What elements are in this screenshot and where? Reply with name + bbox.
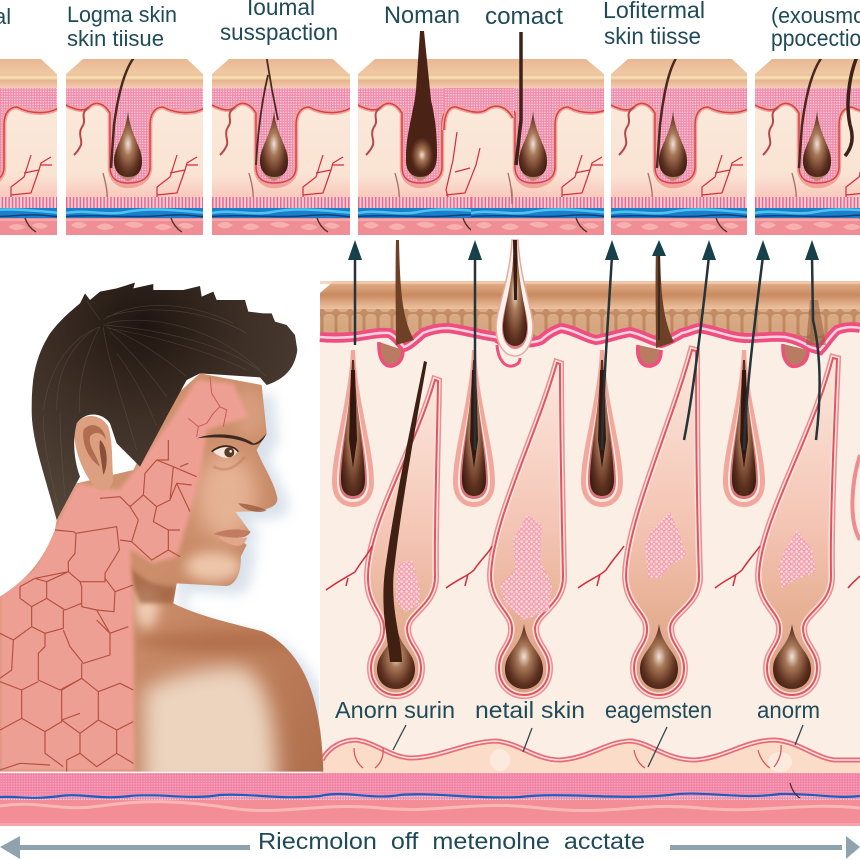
label: anorm: anorm — [757, 697, 820, 723]
label: panel 4 left: Noman — [384, 2, 460, 29]
hair shaft follicle mid right — [656, 250, 674, 348]
arrow: follicle up 4 — [652, 240, 666, 340]
skin base — [0, 373, 323, 772]
swollen follicle 1 — [368, 361, 438, 695]
panel: top skin tissue cross-section 1 — [0, 59, 60, 235]
panel: large skin cross-section — [320, 240, 860, 776]
lips — [213, 529, 251, 546]
label: netail skin: netail skin — [475, 697, 585, 723]
arrow: follicle up 5 — [684, 240, 716, 440]
label: eagemsten: eagemsten — [605, 697, 712, 723]
gland pit 3 — [783, 344, 808, 366]
right edge follicle fragment — [852, 455, 860, 540]
swollen follicle 2 — [491, 363, 563, 695]
capillaries — [326, 546, 860, 590]
label: panel 5 line 2: skin tiisse — [604, 23, 701, 49]
ear — [75, 416, 113, 491]
label: anorn surin: Anorn surin — [335, 697, 455, 723]
arrow: bottom left — [0, 836, 250, 859]
caption: Riecmolon off metenolne acctate — [258, 828, 645, 854]
pink epidermal wave — [320, 327, 860, 350]
gland pit 2 — [638, 345, 661, 366]
leader lines for bottom labels — [393, 725, 803, 767]
arrow: normal follicle up 1 — [348, 240, 362, 345]
swollen follicle 4 — [759, 358, 837, 695]
hair — [32, 283, 297, 520]
gland pit 1 — [379, 342, 403, 366]
skin shading — [0, 380, 297, 790]
cell cluster — [645, 512, 686, 578]
arrow: follicle up 7 — [805, 240, 820, 440]
panel: top skin tissue cross-section 6 — [755, 50, 860, 235]
arrow: bottom right — [670, 836, 860, 859]
heading labels for top panels — [0, 0, 860, 51]
swollen follicle 3 — [626, 350, 699, 695]
pink neck and chest patch — [0, 380, 248, 772]
skin cracks — [0, 377, 227, 772]
panel: top skin tissue cross-section 4, wide with two follicles — [358, 31, 611, 235]
cell cluster — [778, 530, 816, 588]
arrow: normal follicle up 3 — [602, 240, 619, 450]
hair shaft follicle top left — [396, 240, 414, 345]
panel: top skin tissue cross-section 5 — [611, 50, 751, 235]
arrow: normal follicle up 2 — [468, 240, 482, 450]
cell cluster — [500, 515, 552, 620]
panel: top skin tissue cross-section 3 — [212, 48, 352, 235]
bottom labels — [335, 697, 820, 723]
dark hair in follicle — [383, 361, 427, 662]
label: panel 3 line 2: susspaction — [220, 19, 338, 45]
label: panel 2 line 2: skin tiisue — [67, 26, 164, 51]
normal follicles — [332, 350, 374, 507]
nose shading — [238, 503, 267, 512]
eye — [212, 446, 245, 469]
panel: top skin tissue cross-section 2 — [66, 54, 206, 235]
label: panel 2 line 1: Logma skin — [67, 2, 177, 27]
bottom pink skin band — [0, 773, 860, 826]
lower wavy membrane — [322, 740, 860, 775]
soft shadow — [174, 391, 320, 724]
cell cluster — [396, 560, 420, 612]
person profile with cracked skin — [0, 283, 335, 790]
arrow: follicle up 6 — [744, 240, 770, 450]
label: panel 4 right: comact — [485, 3, 563, 30]
skin surface layers — [320, 281, 860, 350]
eyebrow — [197, 433, 267, 445]
raised bulb at skin surface — [496, 240, 533, 356]
dermis background — [320, 320, 860, 776]
pit under bulb — [497, 345, 520, 366]
hair shaft far right base — [806, 300, 826, 345]
